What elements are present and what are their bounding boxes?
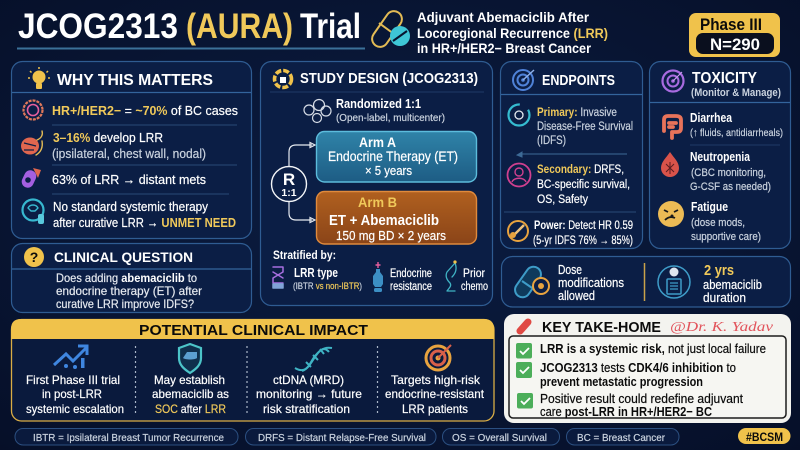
item: SOC: abemaciclib as — [152, 387, 229, 401]
item: ctDNA: monitoring → future — [256, 387, 362, 401]
text: randomized 1:1: (Open-label, multicenter) — [336, 112, 445, 124]
icon: breast — [21, 131, 42, 155]
stratifier: prior chemo: Prior — [463, 268, 485, 280]
legend: DRFS: DRFS = Distant Relapse-Free Survival — [258, 432, 426, 444]
legend: DRFS — [246, 428, 436, 445]
text: neutropenia — [690, 150, 771, 193]
item: ctDNA: risk stratification — [263, 402, 350, 416]
text: dose modifications: Dose — [558, 262, 582, 277]
text: neutropenia: (CBC monitoring, — [691, 167, 766, 179]
icon: calendar duration — [658, 266, 690, 298]
stratifier: endocrine resistance: resistance — [390, 281, 432, 293]
text: randomized 1:1: Randomized 1:1 — [336, 96, 421, 111]
icon: endocrine resistance — [373, 262, 383, 292]
point 2: prevent metastatic progression — [540, 374, 703, 389]
icon: primary endpoint — [508, 104, 530, 126]
legend: BC: BC = Breast Cancer — [577, 432, 665, 444]
icon: metastasis — [20, 168, 41, 190]
legend: OS: OS = Overall Survival — [452, 432, 547, 444]
heading: toxicity: (Monitor & Manage) — [691, 87, 781, 99]
stat: LRR rate: (ipsilateral, chest wall, nodal) — [52, 147, 206, 161]
icon: shield — [179, 344, 201, 373]
point 3: Positive result could redefine adjuvant — [540, 391, 743, 406]
item: first phase III: systemic escalation — [26, 402, 124, 416]
box: arm B: 150 mg BD × 2 years — [336, 228, 446, 243]
text: secondary endpoint: BC-specific survival, — [537, 179, 630, 191]
arrow: primary to secondary — [517, 152, 627, 157]
title — [18, 7, 361, 46]
legend: OS — [442, 428, 560, 445]
point 2: JCOG2313 tests CDK4/6 inhibition to — [540, 360, 736, 375]
panel: dose and duration — [502, 256, 790, 307]
icon: question mark — [24, 247, 44, 267]
icon: LRR type — [273, 267, 283, 288]
text: neutropenia: Neutropenia — [690, 150, 751, 164]
icon: head — [22, 200, 44, 224]
text: primary endpoint — [537, 107, 633, 147]
text: dose modifications: allowed — [558, 288, 595, 303]
text: question: Does adding abemaciclib to — [56, 271, 197, 285]
badge: phase III, N=290 — [689, 13, 780, 57]
box: arm B: Arm B — [358, 194, 397, 210]
heading: potential clinical impact: POTENTIAL CLINICAL IMPACT — [139, 323, 368, 339]
text: fatigue: supportive care) — [691, 231, 761, 243]
heading: toxicity: TOXICITY — [692, 70, 757, 87]
stratifier: prior chemo — [461, 268, 488, 293]
heading: key take-home: KEY TAKE-HOME — [542, 320, 661, 336]
icon: power — [508, 221, 528, 241]
icon: pill and dose — [512, 264, 549, 300]
icon: HR badge — [24, 100, 42, 120]
text: secondary endpoint: OS, Safety — [537, 194, 588, 206]
text: secondary endpoint — [537, 164, 630, 206]
title: JCOG2313 — [18, 7, 178, 46]
badge: phase III, N=290: N=290 — [710, 35, 760, 54]
icon: randomization — [304, 100, 331, 122]
title: Trial — [300, 7, 361, 46]
text: duration: abemaciclib — [703, 278, 762, 292]
icon: study design — [274, 70, 292, 88]
point 2 — [540, 360, 736, 389]
text: unmet need: after curative LRR → UNMET NEED — [53, 215, 236, 230]
icon: blood drop — [661, 152, 679, 177]
legend: IBTR: IBTR = Ipsilateral Breast Tumor Recurrence — [33, 432, 224, 444]
point 3 — [540, 391, 743, 419]
text: primary endpoint: Primary: Invasive — [537, 107, 617, 119]
stratifier: prior chemo: chemo — [461, 281, 488, 293]
text: dose modifications: modifications — [558, 275, 624, 290]
icon: prior chemo — [446, 261, 456, 291]
box: arm A: Arm A — [359, 134, 396, 150]
stat: distant mets: 63% of LRR → distant mets — [52, 172, 206, 187]
text: diarrhea: (↑ fluids, antidiarrheals) — [690, 127, 783, 139]
subtitle: Adjuvant Abemaciclib After — [417, 10, 590, 25]
stratifier: endocrine resistance: Endocrine — [390, 268, 432, 280]
box: arm A — [316, 132, 476, 182]
item: ctDNA — [256, 348, 362, 416]
text: neutropenia: G-CSF as needed) — [690, 181, 771, 193]
text: primary endpoint: Disease-Free Survival — [537, 121, 633, 133]
icon: DNA helix — [295, 348, 332, 371]
heading: endpoints: ENDPOINTS — [542, 73, 615, 89]
stat: LRR rate — [52, 130, 206, 161]
text: question — [56, 271, 202, 311]
item: targets high-risk — [385, 345, 485, 416]
hashtag badge — [738, 428, 790, 444]
heading: clinical question: CLINICAL QUESTION — [54, 249, 193, 265]
icon: light bulb — [28, 67, 50, 89]
arrow: to arm A — [289, 142, 315, 166]
item: SOC: SOC after LRR — [155, 402, 226, 416]
panel: study design — [260, 62, 492, 306]
icon: intestine — [664, 116, 681, 138]
item: ctDNA: ctDNA (MRD) — [273, 373, 344, 387]
text: randomized 1:1 — [336, 96, 445, 124]
text: dose modifications — [558, 262, 624, 303]
stratifier: LRR type: (IBTR vs non-IBTR) — [293, 281, 362, 292]
randomization circle: R — [283, 170, 295, 189]
text: diarrhea: Diarrhea — [690, 111, 733, 125]
legend: IBTR — [15, 428, 238, 445]
item: first phase III: in post-LRR — [42, 387, 102, 401]
item: SOC: May establish — [154, 373, 225, 387]
icon: pill — [369, 8, 410, 50]
box: arm B: ET + Abemaciclib — [329, 212, 439, 229]
item: first phase III — [26, 346, 124, 416]
text: duration — [703, 262, 762, 305]
icon: toxicity target — [662, 70, 684, 92]
item: SOC — [152, 344, 229, 416]
badge: phase III, N=290: Phase III — [700, 15, 762, 34]
text: power: Power: Detect HR 0.59 — [534, 220, 633, 232]
text: duration: duration — [703, 291, 746, 305]
panel: why this matters — [12, 62, 252, 238]
text: duration: 2 yrs — [704, 262, 734, 279]
panel: toxicity — [650, 62, 790, 248]
icon: bullseye — [426, 345, 451, 370]
stratifier: LRR type — [293, 266, 362, 292]
item: targets high-risk: endocrine-resistant — [385, 387, 485, 401]
item: first phase III: First Phase III trial — [26, 373, 120, 387]
text: question: endocrine therapy (ET) after — [56, 284, 202, 298]
item: targets high-risk: LRR patients — [402, 402, 468, 416]
text: question: curative LRR improve IDFS? — [56, 297, 194, 311]
panel: endpoints — [500, 62, 642, 248]
item: targets high-risk: Targets high-risk — [391, 373, 481, 387]
legend: BC — [566, 428, 679, 445]
subtitle: in HR+/HER2− Breast Cancer — [417, 41, 592, 56]
text: power: (5-yr IDFS 76% → 85%) — [533, 235, 633, 247]
text: secondary endpoint: Secondary: DRFS, — [537, 164, 624, 176]
subtitle: Locoregional Recurrence (LRR) — [417, 26, 608, 41]
icon: pin — [520, 322, 528, 331]
stat: 70 percent: HR+/HER2− = ~70% of BC cases — [52, 103, 238, 118]
handwritten credit: @Dr. K. Yadav — [670, 320, 774, 335]
heading: study design: STUDY DESIGN (JCOG2313) — [300, 71, 478, 87]
title: (AURA) — [186, 7, 293, 46]
box: arm A: Endocrine Therapy (ET) — [328, 148, 458, 164]
checkmark 2 — [516, 362, 532, 378]
icon: secondary endpoint — [508, 164, 530, 186]
stratifier: endocrine resistance — [390, 268, 432, 293]
text: diarrhea — [690, 111, 783, 139]
text: unmet need: No standard systemic therapy — [53, 199, 208, 214]
text: fatigue: Fatigue — [691, 200, 728, 214]
text: power — [533, 220, 633, 247]
icon: target — [513, 70, 534, 90]
panel: clinical question — [12, 244, 252, 312]
stat: LRR rate: 3–16% develop LRR — [53, 130, 163, 145]
icon: rising chart — [54, 346, 87, 369]
randomization circle — [272, 166, 306, 202]
box: arm A: × 5 years — [365, 164, 412, 178]
panel: key take-home — [504, 314, 791, 423]
checkmark 3 — [517, 393, 533, 408]
text: fatigue: (dose mods, — [691, 217, 745, 229]
point 1: LRR is a systemic risk, not just local failure — [540, 341, 766, 356]
randomization circle: 1:1 — [281, 187, 297, 199]
stratifier: LRR type: LRR type — [294, 266, 338, 280]
heading: toxicity — [691, 70, 781, 99]
text: fatigue — [691, 200, 761, 243]
arrow: to arm B — [289, 202, 315, 222]
hashtag badge: #BCSM — [746, 432, 783, 444]
box: arm B — [316, 192, 476, 244]
icon: question mark: ? — [30, 249, 38, 265]
text: primary endpoint: (IDFS) — [537, 135, 566, 147]
point 3: care post-LRR in HR+/HER2− BC — [540, 404, 713, 419]
text: unmet need — [53, 199, 236, 230]
checkmark 1 — [516, 343, 532, 358]
subtitle — [417, 10, 608, 56]
text: stratified by: Stratified by: — [273, 248, 336, 262]
heading: why this matters: WHY THIS MATTERS — [57, 72, 213, 89]
icon: tired face — [658, 201, 684, 227]
panel: potential clinical impact — [11, 319, 494, 421]
